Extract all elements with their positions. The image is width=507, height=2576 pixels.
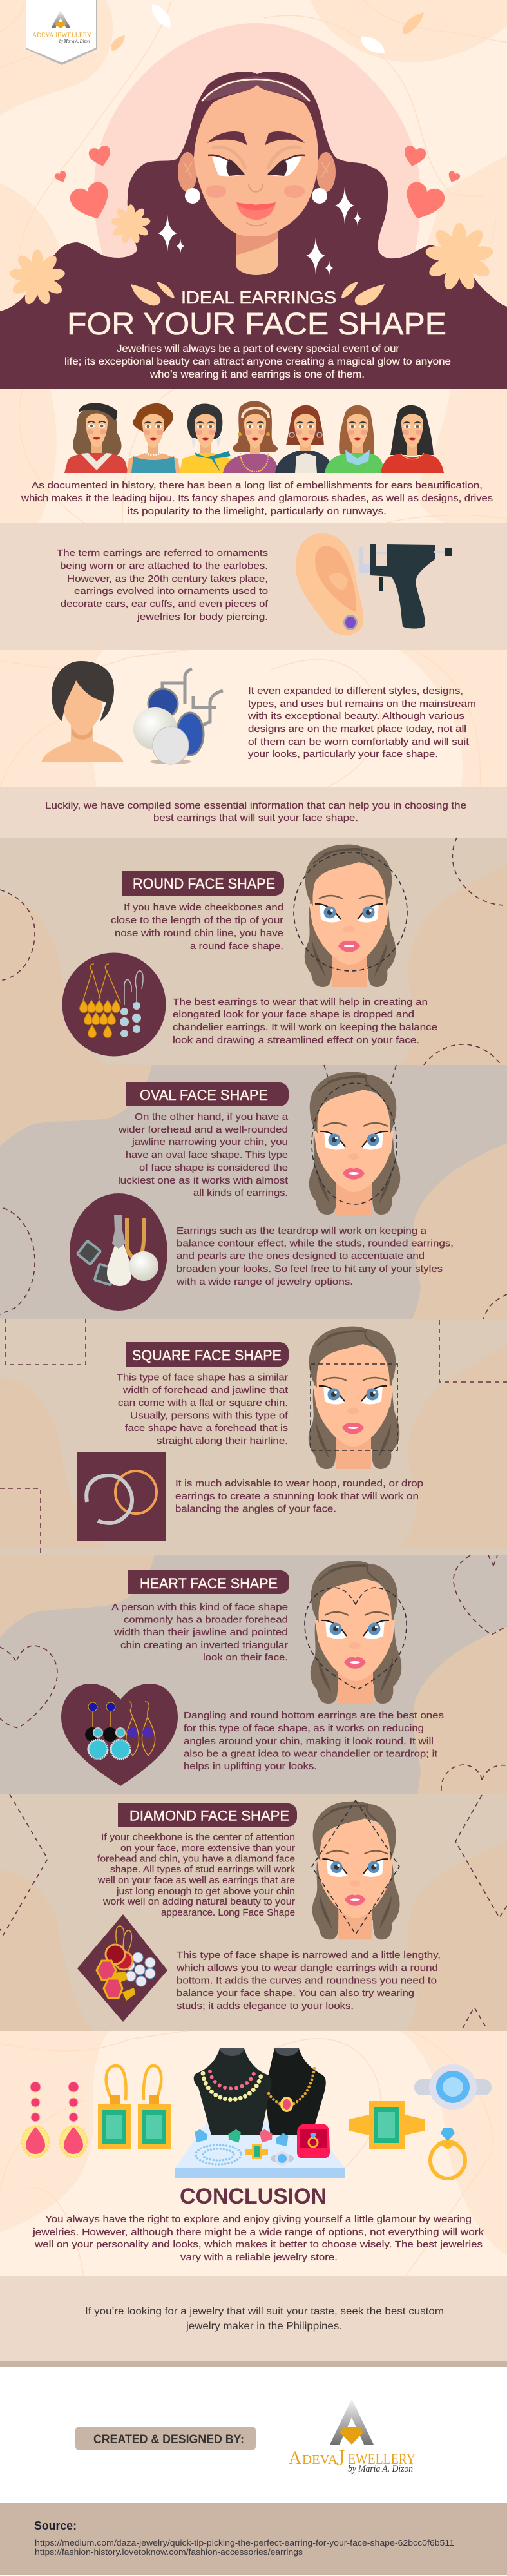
heading: heart (128, 1570, 289, 1594)
icon: sapphire ring (414, 2064, 492, 2110)
text: heart recommendation: also be a great idea to wear chandelier or teardrop; it (184, 1749, 438, 1759)
text: oval recommendation: with a wide range of jewelry options. (176, 1276, 353, 1287)
woman 7 (381, 405, 444, 473)
credit label (75, 2427, 256, 2450)
text: round definition (111, 902, 283, 952)
heading: source: Source: (34, 2519, 77, 2532)
text: square definition: face shape have a forehead that is (125, 1423, 288, 1434)
woman 2 (127, 403, 180, 473)
text: round recommendation (173, 997, 437, 1046)
panel: history (0, 389, 507, 523)
logo: DEVA (302, 2452, 338, 2467)
decorative leaves (152, 4, 385, 53)
text: square recommendation: balancing the angles of your face. (175, 1504, 336, 1514)
panel: oval face shape (0, 1065, 507, 1319)
text: square definition: straight along their hairline. (157, 1436, 288, 1447)
text: diamond definition (97, 1832, 296, 1918)
text: round definition: If you have wide cheekbones and (124, 902, 283, 913)
pink arch behind portrait (94, 23, 420, 264)
text: call to action (85, 2306, 444, 2332)
text: expanded styles (247, 686, 476, 760)
text: history: As documented in history, there has been a long list of embellishments for ears beautification, (32, 480, 483, 491)
panel: term earrings (0, 523, 507, 650)
text: call to action: If you’re looking for a jewelry that will suit your taste, seek the best custom (85, 2306, 444, 2317)
heading: square (126, 1342, 289, 1367)
text: round definition: a round face shape. (190, 941, 283, 952)
logo badge (26, 0, 97, 65)
heading: diamond (118, 1803, 297, 1827)
hearts right (399, 144, 461, 226)
text: oval recommendation: broaden your looks. So feel free to hit any of your styles (177, 1264, 443, 1274)
text: term earrings: The term earrings are referred to ornaments (57, 548, 268, 559)
text: square recommendation: earrings to create a stunning look that will work on (175, 1491, 419, 1502)
logo (289, 2399, 416, 2474)
text: diamond recommendation: This type of face shape is narrowed and a little lengthy, (177, 1950, 441, 1961)
icon: round earrings badge (62, 952, 166, 1057)
text: oval definition (118, 1111, 289, 1198)
text: diamond definition: shape. All types of stud earrings will work (110, 1864, 296, 1875)
text: round recommendation: chandelier earrings. It will work on keeping the balance (173, 1022, 437, 1033)
text: oval recommendation: and pearls are the ones designed to accentuate and (177, 1251, 425, 1262)
intro text: life; its exceptional beauty can attract anyone creating a magical glow to anyone (64, 356, 451, 367)
text: conclusion: You always have the right to explore and enjoy giving yourself a little glamour by wearing (45, 2214, 472, 2225)
text: history: its popularity to the limelight, particularly on runways. (128, 506, 387, 517)
text: heart recommendation (184, 1710, 444, 1772)
icon: diamond earrings badge (77, 1914, 167, 2022)
panel: square face shape (0, 1319, 507, 1555)
text: round recommendation: elongated look for your face shape is dropped and (173, 1009, 414, 1020)
text: heart definition: commonly has a broader forehead (124, 1615, 288, 1626)
icon: heart earrings badge (61, 1684, 178, 1786)
text: expanded styles: your looks, particularly your face shape. (248, 749, 438, 760)
source links: https://medium.com/daza-jewelry/quick-tip-picking-the-perfect-earring-for-your-face-shape-62bcc0f6b511 (35, 2538, 454, 2548)
gems on table (191, 2128, 292, 2150)
text: expanded styles: It even expanded to different styles, designs, (248, 686, 463, 697)
icon: heart face (305, 1561, 407, 1704)
woman 4 (223, 401, 279, 473)
text: history (21, 480, 493, 517)
logo: by Maria A. Dizon (348, 2464, 413, 2474)
title: FOR YOUR FACE SHAPE (67, 307, 446, 341)
icon: oval face (309, 1072, 400, 1215)
panel: sources (0, 2503, 507, 2575)
text: diamond recommendation (176, 1950, 441, 2012)
text: term earrings: decorate cars, ear cuffs, and even pieces of (61, 599, 269, 610)
text: heart definition: A person with this kind of face shape (111, 1602, 288, 1613)
text: term earrings: jewelries for body piercing. (137, 611, 268, 622)
hearts left (53, 144, 115, 226)
text: diamond definition: appearance. Long Face Shape (161, 1907, 295, 1918)
credit label: CREATED & DESIGNED BY: (93, 2433, 244, 2446)
text: heart recommendation: Dangling and round bottom earrings are the best ones (184, 1710, 444, 1721)
text: heart recommendation: for this type of face shape, as it works on reducing (184, 1723, 424, 1734)
text: heart definition: width than their jawline and pointed (113, 1627, 288, 1638)
text: diamond definition: well on your face as well as earrings that are (97, 1875, 295, 1886)
panel: credits (0, 2367, 507, 2503)
woman 6 (325, 405, 385, 473)
text: luckily: best earrings that will suit your face shape. (153, 812, 358, 823)
text: term earrings (57, 548, 269, 622)
portrait face (178, 76, 336, 275)
text: oval definition: luckiest one as it works with almost (118, 1175, 289, 1186)
text: round definition: close to the length of the tip of your (111, 915, 283, 926)
text: conclusion: well on your personality and looks, which makes it better to choose wisely. The best jewelries (34, 2239, 483, 2250)
text: oval definition: of face shape is considered the (139, 1162, 288, 1173)
text: history: which makes it the leading bijou. Its fancy shapes and glamorous shades, as well as designs, drives (21, 493, 493, 504)
panel: luckily (0, 787, 507, 838)
woman 5 (275, 405, 333, 473)
intro text (64, 343, 451, 380)
panel: heart face shape (0, 1555, 507, 1794)
heading: square: SQUARE FACE SHAPE (132, 1347, 282, 1363)
text: diamond recommendation: studs; it adds elegance to your looks. (177, 2001, 354, 2012)
text: square definition: can come with a flat or square chin. (118, 1398, 288, 1408)
panel: round face shape (0, 838, 507, 1065)
text: heart definition (111, 1602, 288, 1663)
text: square definition: This type of face shape has a similar (117, 1372, 288, 1383)
text: diamond recommendation: bottom. It adds the curves and roundness you need to (177, 1975, 437, 1986)
orange leaves (111, 12, 424, 51)
heading: heart: HEART FACE SHAPE (140, 1575, 278, 1591)
seven women illustration (64, 401, 444, 473)
icon: emerald earrings (98, 2066, 171, 2149)
icon: square face (309, 1327, 399, 1469)
icon: necklace display (175, 2048, 345, 2178)
text: round recommendation: The best earrings to wear that will help in creating an (173, 997, 428, 1008)
text: diamond recommendation: which allows you to wear dangle earrings with a round (176, 1963, 438, 1974)
text: luckily: Luckily, we have compiled some essential information that can help you in choosing the (45, 800, 466, 811)
text: square recommendation (175, 1478, 423, 1514)
icon: diamond face (312, 1800, 400, 1939)
text: oval definition: On the other hand, if you have a (135, 1111, 289, 1122)
icon: gold diamond ring (430, 2128, 465, 2178)
icon: emerald ring (349, 2101, 425, 2149)
text: round definition: nose with round chin line, you have (115, 928, 283, 939)
title leaves (131, 282, 385, 305)
heading: oval: OVAL FACE SHAPE (140, 1087, 268, 1103)
text: diamond definition: just long enough to get above your chin (116, 1886, 295, 1897)
portrait hair and dark title field (0, 72, 507, 389)
source links (35, 2538, 454, 2557)
text: heart definition: look on their face. (203, 1652, 288, 1663)
text: oval recommendation: Earrings such as the teardrop will work on keeping a (177, 1226, 427, 1236)
source links: https://fashion-history.lovetoknow.com/fashion-accessories/earrings (35, 2547, 303, 2557)
text: square definition (117, 1372, 289, 1447)
title: IDEAL EARRINGS (181, 287, 336, 307)
title (67, 287, 446, 341)
text: oval definition: jawline narrowing your chin, you (131, 1137, 288, 1148)
text: square definition: Usually, persons with this type of (130, 1410, 289, 1421)
text: conclusion: jewelries. However, although there might be a wide range of options, not everything will work (32, 2227, 484, 2238)
text: expanded styles: of them can be worn comfortably and will suit (248, 736, 470, 747)
text: expanded styles: with its exceptional beauty. Although various (247, 711, 464, 722)
text: term earrings: earrings evolved into ornaments used to (74, 586, 268, 597)
text: diamond definition: forehead and chin, you have a diamond face (97, 1853, 295, 1865)
icon: pink drop earrings (22, 2082, 87, 2157)
icon: round face (294, 845, 407, 987)
pearl earrings (185, 188, 327, 204)
intro text: Jewelries will always be a part of every special event of our (117, 343, 399, 354)
text: conclusion: vary with a reliable jewelry store. (180, 2252, 338, 2263)
panel: call to action (0, 2276, 507, 2367)
heading: diamond: DIAMOND FACE SHAPE (129, 1808, 289, 1823)
woman 1 (64, 403, 128, 473)
text: oval definition: wider forehead and a well-rounded (118, 1124, 288, 1135)
heading: round: ROUND FACE SHAPE (133, 876, 275, 892)
text: term earrings: being worn or are attached to the earlobes. (60, 561, 268, 572)
heading: oval (126, 1082, 289, 1106)
text: diamond definition: If your cheekbone is the center of attention (101, 1832, 295, 1843)
panel: diamond face shape (0, 1794, 507, 2031)
text: oval recommendation: balance contour effect, while the studs, rounded earrings, (177, 1238, 454, 1249)
icon: hoop earrings badge (77, 1452, 166, 1541)
icon: oval earrings badge (70, 1193, 167, 1311)
intro text: who’s wearing it and earrings is one of them. (149, 369, 365, 380)
panel: expanded styles (0, 650, 507, 787)
text: heart recommendation: angles around your chin, making it look round. It will (184, 1736, 434, 1747)
icon: short-haired woman (41, 661, 124, 762)
icon: ear with stud (296, 533, 363, 635)
woman 3 (180, 403, 233, 473)
logo badge: by Maria A. Dizon (59, 39, 90, 44)
text: call to action: jewelry maker in the Philippines. (186, 2321, 342, 2332)
icon: pearl and sapphire earrings (133, 669, 223, 764)
icon: piercing gun (359, 544, 452, 629)
text: diamond recommendation: balance your face shape. You can also try wearing (177, 1988, 414, 1999)
text: expanded styles: designs are on the market place today, not all (248, 724, 466, 735)
text: diamond definition: on your face, more extensive than your (120, 1843, 295, 1854)
text: square recommendation: It is much advisable to wear hoop, rounded, or drop (175, 1478, 423, 1489)
text: oval definition: all kinds of earrings. (193, 1187, 288, 1198)
sparkles (158, 187, 361, 276)
flowers (9, 204, 494, 306)
text: conclusion (32, 2214, 484, 2263)
text: heart definition: chin creating an inverted triangular (120, 1640, 288, 1651)
text: diamond definition: work well on adding natural beauty to your (102, 1896, 295, 1907)
panel: conclusion (0, 2031, 507, 2276)
text: oval definition: have an oval face shape. This type (126, 1149, 288, 1160)
logo: A (289, 2447, 301, 2468)
text: oval recommendation (176, 1226, 454, 1287)
text: luckily (45, 800, 466, 823)
text: expanded styles: types, and uses but remains on the mainstream (248, 698, 476, 709)
heading: conclusion: CONCLUSION (180, 2184, 327, 2209)
logo: EWELLERY (348, 2451, 416, 2467)
logo: J (336, 2445, 345, 2470)
logo badge: ADEVA JEWELLERY (32, 30, 91, 39)
heading: round (122, 871, 284, 896)
text: heart recommendation: helps in uplifting your looks. (184, 1761, 317, 1772)
text: round recommendation: look and drawing a streamlined effect on your face. (173, 1035, 419, 1046)
text: square definition: width of forehead and jawline that (122, 1385, 289, 1396)
text: term earrings: However, as the 20th century takes place, (67, 573, 268, 584)
hero panel (0, 0, 507, 389)
